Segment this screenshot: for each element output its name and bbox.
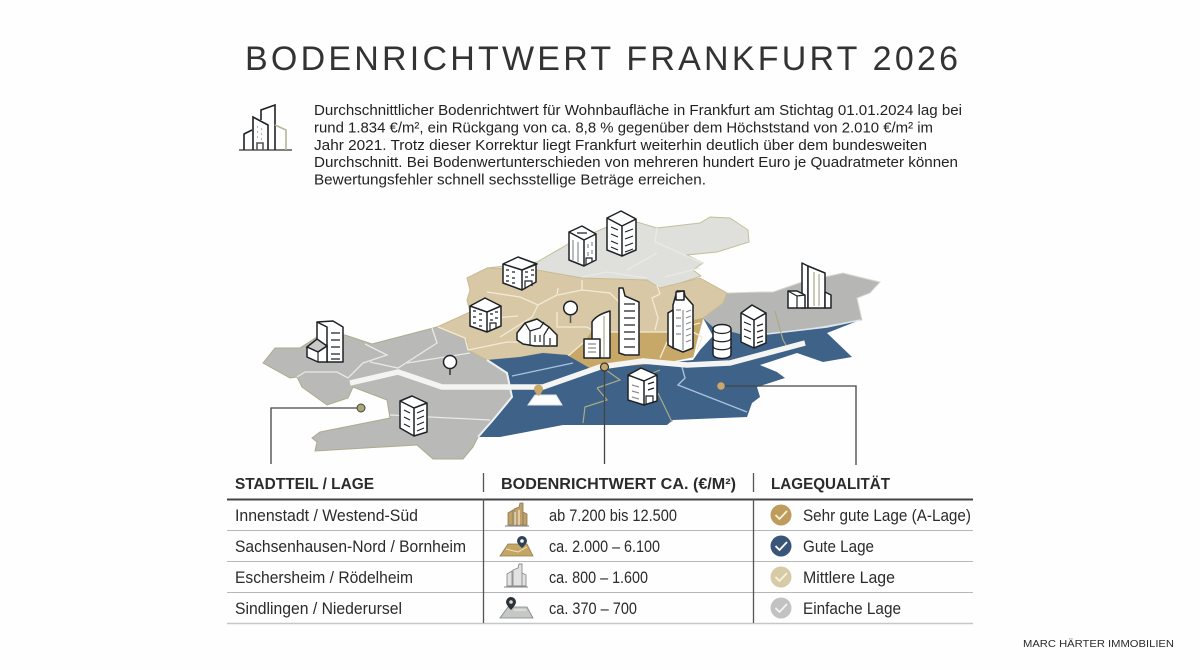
icon: tan check [770, 566, 792, 588]
building: stepped skyscraper [668, 291, 693, 352]
map of Frankfurt districts [263, 211, 880, 465]
icon: gold check [770, 504, 792, 526]
column: location quality [803, 507, 971, 618]
column: land values: ca. 2.000 – 6.100 [549, 538, 660, 556]
column: district names: Sachsenhausen-Nord / Bornheim [235, 538, 466, 556]
column: location quality: Gute Lage [803, 538, 874, 556]
building: east cluster [788, 263, 831, 308]
callout: centre [600, 363, 608, 464]
icon: grey map with pin [500, 597, 533, 618]
column: land values [549, 507, 677, 618]
intro paragraph [314, 102, 962, 188]
building: south-west [400, 396, 427, 436]
district zone: east grey [703, 273, 880, 336]
building: tower north 1 [569, 226, 596, 266]
district zone: central tan [437, 268, 727, 370]
intro paragraph: Durchschnittlicher Bodenrichtwert für Wohnbaufläche in Frankfurt am Stichtag 01.01.2024 lag bei [314, 102, 962, 119]
column: district names: Sindlingen / Niederursel [235, 600, 402, 618]
table header [235, 476, 891, 493]
building: house [517, 319, 557, 346]
column: land values: ca. 800 – 1.600 [549, 569, 648, 587]
column: district names [235, 507, 466, 618]
intro paragraph: Durchschnitt. Bei Bodenwertunterschieden von mehreren hundert Euro je Quadratmeter können [314, 154, 958, 171]
building: east tower [741, 305, 766, 348]
building: tower north 2 [607, 211, 636, 256]
table header: LAGEQUALITÄT [771, 476, 891, 493]
callout: right [717, 382, 856, 465]
icon: gold map with pin [500, 536, 533, 556]
icon: cylinder building [713, 324, 731, 358]
building: west [307, 321, 343, 362]
main road [350, 343, 805, 387]
district zone: north light grey [487, 217, 749, 290]
table [227, 473, 973, 624]
column: district names: Innenstadt / Westend-Süd [235, 507, 418, 525]
district zone: south and river blue [478, 311, 860, 437]
column: district names: Eschersheim / Rödelheim [235, 569, 413, 587]
column: location quality: Einfache Lage [803, 600, 901, 618]
district zone: central gold [567, 318, 703, 370]
callout: left [271, 404, 365, 464]
pin: north [564, 301, 577, 323]
district zone: west grey [263, 327, 512, 459]
pin: west [444, 356, 456, 375]
column: location quality: Mittlere Lage [803, 569, 895, 587]
title: BODENRICHTWERT FRANKFURT 2026 [245, 40, 958, 78]
column: land values: ab 7.200 bis 12.500 [549, 507, 677, 525]
table header: BODENRICHTWERT CA. (€/M²) [501, 476, 736, 493]
intro paragraph: rund 1.834 €/m², ein Rückgang von ca. 8,8 % gegenüber dem Höchststand von 2.010 €/m² im [314, 120, 933, 136]
building: low curved tower [584, 311, 610, 358]
building: south block on blue [628, 368, 657, 405]
intro paragraph: Bewertungsfehler schnell sechsstellige Beträge erreichen. [314, 172, 706, 188]
credit: MARC HÄRTER IMMOBILIEN [1023, 638, 1174, 650]
building: north-west block [470, 298, 501, 332]
icon: blue check [770, 536, 792, 556]
column: location quality: Sehr gute Lage (A-Lage) [803, 507, 971, 525]
intro paragraph: Jahr 2021. Trotz dieser Korrektur liegt Frankfurt weiterhin deutlich über dem bundesweiten [314, 137, 927, 154]
table grid [227, 473, 973, 624]
icon: skyline [239, 105, 292, 150]
building: tall tower [619, 288, 639, 355]
icon: gold buildings [505, 503, 529, 526]
table header: STADTTEIL / LAGE [235, 476, 374, 493]
icon: grey buildings [504, 564, 528, 587]
icon: map sheet with pin [528, 384, 562, 405]
west and blue district border [478, 360, 512, 437]
building: north block [503, 257, 537, 290]
column: land values: ca. 370 – 700 [549, 600, 637, 618]
icon: grey check [770, 598, 792, 618]
